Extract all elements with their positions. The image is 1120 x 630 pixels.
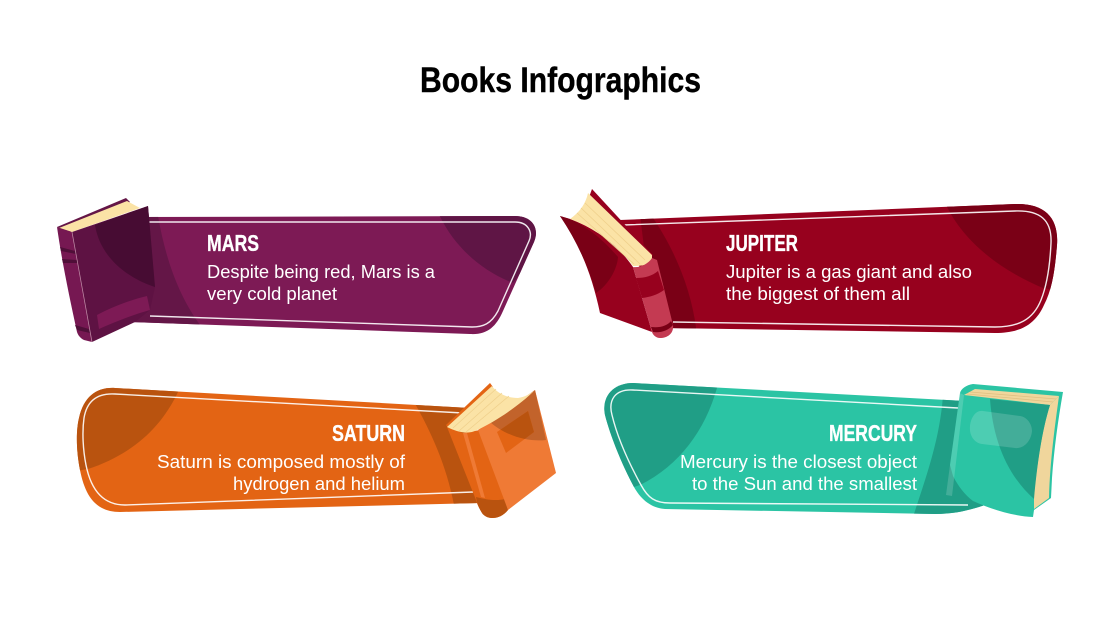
text: Saturn description: hydrogen and helium [233,474,405,494]
banner: Mercury [604,383,984,514]
text: Jupiter description: the biggest of them all [726,284,910,304]
heading: Jupiter: JUPITER [726,230,798,256]
banner: Jupiter [620,198,1065,335]
heading: Saturn: SATURN [332,420,405,446]
title: Books Infographics [420,60,701,100]
icon: teal book [946,384,1063,517]
text: Mars description [207,262,436,304]
heading: Mercury: MERCURY [829,420,917,446]
text: Mercury description [680,452,917,494]
icon: red book [560,189,673,338]
icon: orange book [446,383,556,518]
text: Mercury description: to the Sun and the smallest [692,474,917,494]
banner: Mars [130,210,545,334]
text: Mars description: Despite being red, Mars is a [207,262,436,282]
icon: purple book [57,198,155,342]
text: Saturn description [157,452,406,494]
text: Mars description: very cold planet [207,284,337,304]
panel: Mars [57,198,545,342]
text: Jupiter description: Jupiter is a gas giant and also [726,262,972,282]
text: Saturn description: Saturn is composed mostly of [157,452,406,472]
text: Mercury description: Mercury is the closest object [680,452,917,472]
banner: Saturn [70,380,480,512]
heading: Mars: MARS [207,230,259,256]
panel: Saturn [70,380,556,518]
text: Jupiter description [726,262,972,304]
panel: Mercury [595,375,1063,520]
panel: Jupiter [560,189,1065,338]
